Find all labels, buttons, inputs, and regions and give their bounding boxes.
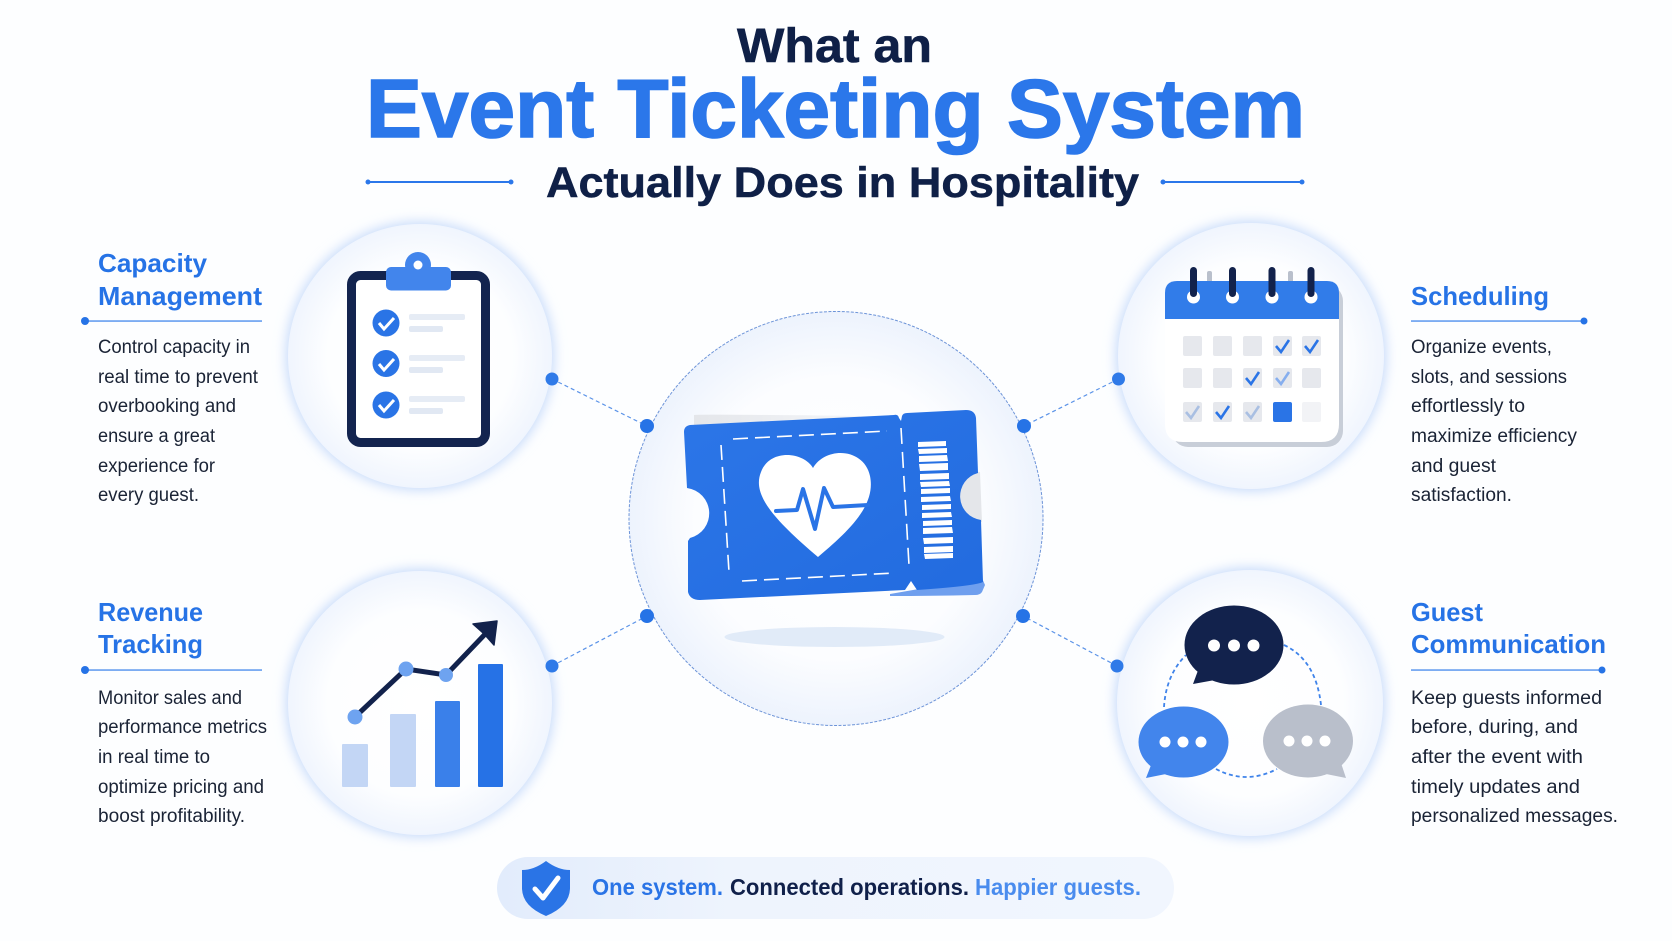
body text: before, during, and: [1411, 717, 1578, 738]
body text: experience for: [98, 456, 216, 477]
body text: performance metrics: [98, 717, 267, 738]
body text: in real time to: [98, 747, 210, 768]
heading: Scheduling: [1411, 281, 1549, 311]
body text: real time to prevent: [98, 367, 259, 388]
body text: [98, 337, 259, 506]
ticket heart: [759, 453, 871, 557]
body text: and guest: [1411, 456, 1497, 477]
banner text: [592, 874, 1141, 900]
ticket under edge: [890, 578, 985, 596]
body text: every guest.: [98, 485, 199, 506]
ticket tear line: [901, 428, 909, 565]
rule: [1411, 666, 1606, 674]
ticket shadow: [724, 627, 944, 647]
title line: What an: What an: [737, 20, 932, 73]
rule: [81, 317, 262, 325]
body text: Monitor sales and: [98, 688, 242, 709]
icon: gray chat bubble: [1263, 704, 1353, 778]
icon: blue chat bubble: [1138, 706, 1228, 778]
bar chart: [342, 664, 503, 787]
body text: ensure a great: [98, 426, 216, 447]
icon: navy chat bubble: [1184, 606, 1284, 684]
icon: clipboard: [352, 252, 486, 442]
heart pulse: [776, 488, 868, 529]
clipboard clip: [386, 252, 451, 290]
body text: timely updates and: [1411, 777, 1580, 798]
checklist item 3: [372, 392, 465, 418]
rule: [1411, 318, 1588, 324]
checklist item 1: [372, 310, 465, 336]
ticket body: [684, 410, 983, 600]
calendar rings: [1187, 267, 1318, 304]
body text: after the event with: [1411, 747, 1583, 768]
panel: capacity management: [81, 222, 558, 506]
body text: slots, and sessions: [1411, 367, 1567, 388]
node: [546, 372, 558, 386]
circle: communication: [1115, 568, 1385, 838]
panel: guest communication: [1110, 568, 1618, 838]
body text: [1411, 688, 1618, 827]
body text: effortlessly to: [1411, 396, 1525, 417]
body text: Organize events,: [1411, 337, 1552, 358]
body text: Control capacity in: [98, 337, 250, 358]
body text: [98, 688, 267, 827]
connector node dots: [640, 419, 1031, 623]
heading: Tracking: [98, 629, 203, 659]
panel: revenue tracking: [81, 569, 558, 837]
banner text: Happier guests.: [975, 874, 1141, 900]
footer banner: [497, 857, 1174, 919]
circle: revenue: [286, 569, 554, 837]
ticket back layer: [694, 415, 860, 430]
ticket back notch: [955, 470, 982, 524]
body text: optimize pricing and: [98, 777, 264, 798]
heading: [98, 248, 262, 311]
banner pill: [497, 857, 1174, 919]
icon: calendar: [1165, 267, 1343, 447]
body text: overbooking and: [98, 396, 236, 417]
heading: [98, 597, 203, 659]
title: [366, 20, 1305, 207]
heading: Guest: [1411, 597, 1483, 627]
title rule: right: [1160, 180, 1304, 184]
heading: [1411, 597, 1606, 659]
body text: Keep guests informed: [1411, 688, 1602, 709]
heading: Revenue: [98, 597, 203, 627]
title line: Event Ticketing System: Event Ticketing System: [366, 62, 1305, 155]
body text: personalized messages.: [1411, 806, 1618, 827]
heading: Capacity: [98, 248, 208, 278]
central circle: [629, 312, 1043, 726]
dashed links between bubbles: [1164, 645, 1321, 777]
ticket barcode: [918, 441, 953, 559]
title line: Actually Does in Hospitality: Actually Does in Hospitality: [546, 159, 1139, 207]
calendar grid: [1183, 336, 1321, 422]
banner text: One system.: [592, 874, 723, 900]
banner text: Connected operations.: [730, 874, 969, 900]
body text: satisfaction.: [1411, 485, 1512, 506]
rule: [81, 666, 262, 674]
circle: capacity: [286, 222, 554, 490]
circle: scheduling: [1116, 221, 1386, 491]
body text: maximize efficiency: [1411, 426, 1577, 447]
connector lines and nodes: [552, 379, 1118, 666]
icon: shield: [522, 861, 570, 916]
central circle with ticket: [629, 312, 1043, 726]
node: [1112, 372, 1125, 386]
trend arrow: [348, 621, 497, 724]
ticket dashed frame: [721, 431, 895, 581]
heading: Communication: [1411, 629, 1606, 659]
panel: scheduling: [1112, 221, 1588, 506]
body text: boost profitability.: [98, 806, 245, 827]
node: [1110, 660, 1124, 672]
node: [546, 660, 558, 672]
title rule: left: [366, 180, 514, 184]
body text: [1411, 337, 1577, 506]
checklist item 2: [372, 350, 465, 377]
heading: Management: [98, 281, 262, 311]
